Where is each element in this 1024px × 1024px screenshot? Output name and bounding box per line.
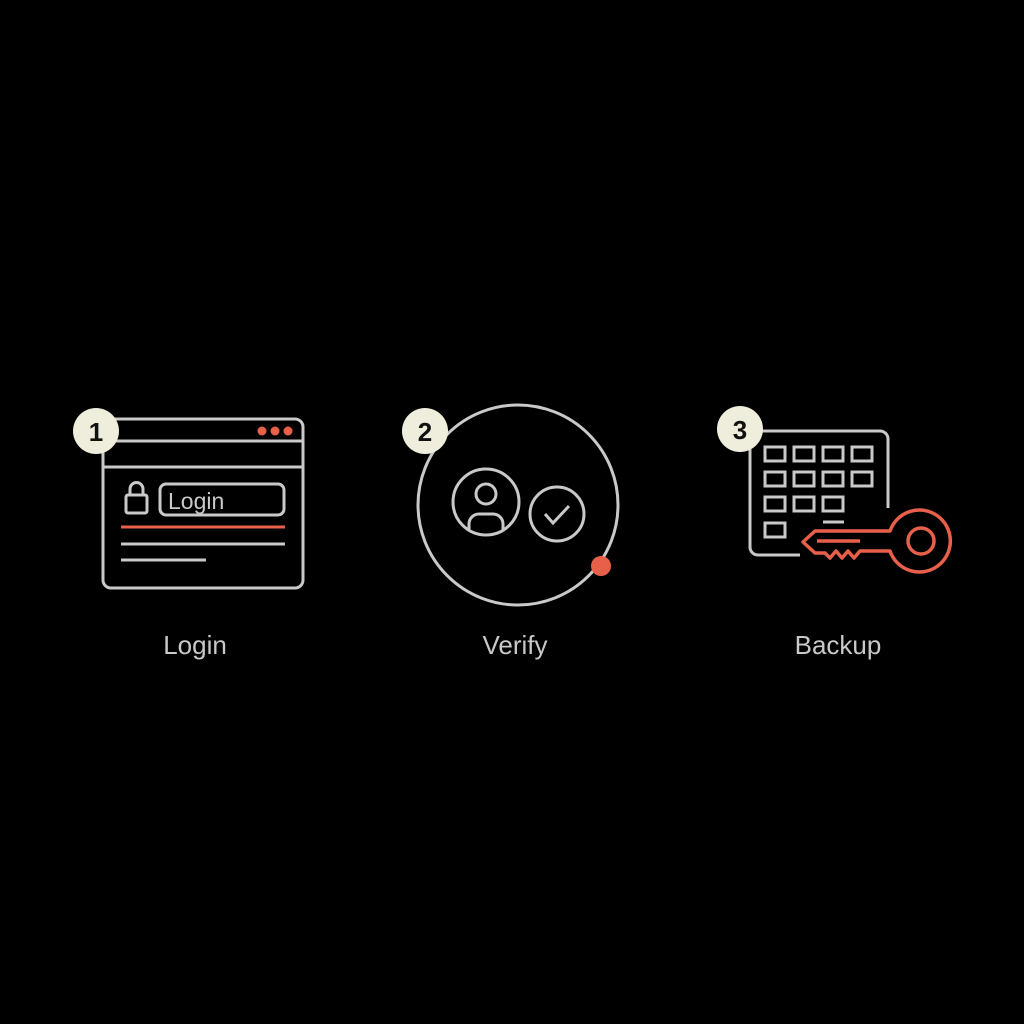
badge: 1: 1 — [89, 417, 103, 447]
panel: backup — [717, 406, 950, 660]
icon: code grid — [750, 431, 888, 555]
panel: login — [73, 408, 303, 660]
icon: browser window — [103, 419, 303, 588]
badge: 2: 2 — [418, 417, 432, 447]
icon: key — [803, 510, 950, 572]
panel: login: Login — [168, 488, 224, 514]
label: Backup: Backup — [795, 630, 881, 660]
badge: 3 — [717, 406, 763, 452]
panel: verify — [402, 405, 618, 660]
badge: 3: 3 — [733, 415, 747, 445]
label: Verify: Verify — [482, 630, 548, 660]
icon: verify circle — [418, 405, 618, 605]
label: Login: Login — [163, 630, 227, 660]
badge: 1 — [73, 408, 119, 454]
badge: 2 — [402, 408, 448, 454]
